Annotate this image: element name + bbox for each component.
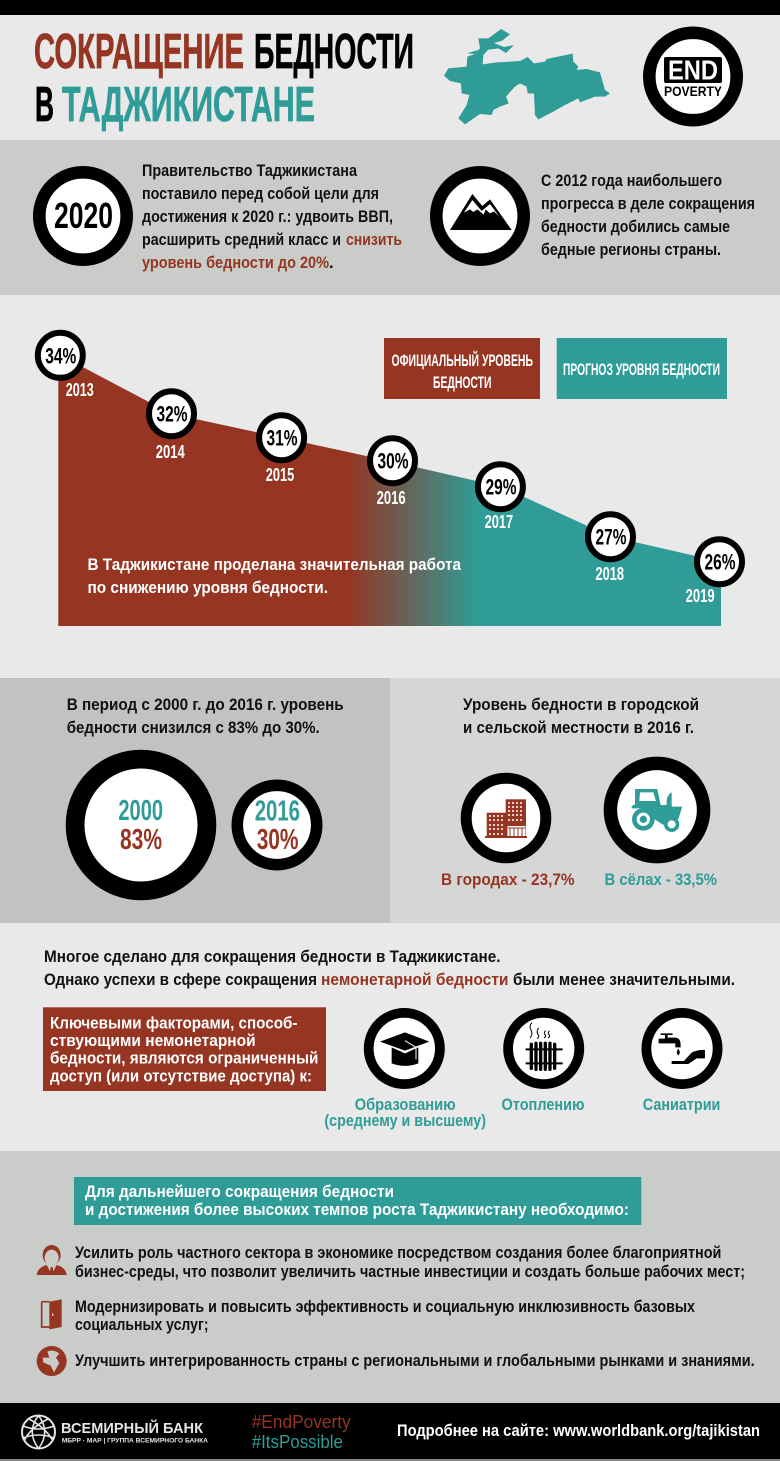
legend: official: [384, 338, 540, 399]
data point 2018: 27%: [596, 525, 626, 550]
label: education: (среднему и высшему): [324, 1112, 486, 1130]
legend: official: БЕДНОСТИ: [433, 373, 492, 392]
callout: key factors: доступ (или отсутствие доступа) к:: [50, 1068, 312, 1086]
data point 2015: 2015: [266, 465, 294, 485]
panel: footer: [0, 1403, 780, 1461]
circle 2016: 30%: [257, 824, 299, 856]
logo: World Bank: МБРР · МАР | ГРУППА ВСЕМИРНОГО БАНКА: [62, 1438, 208, 1445]
data point 2019: [686, 539, 742, 606]
data point 2016: 2016: [377, 488, 406, 508]
heading: и сельской местности в 2016 г.: [463, 719, 694, 737]
icon: 2020 circle: 2020: [54, 195, 113, 236]
heading: В период с 2000 г. до 2016 г. уровень: [67, 696, 344, 714]
panel: poverty chart: [0, 295, 780, 678]
data point 2015: 31%: [266, 426, 298, 451]
icon: 2020 circle: [39, 172, 127, 260]
hashtags: #ItsPossible: [252, 1432, 343, 1452]
heading box: и достижения более высоких темпов роста Таджикистану необходимо:: [85, 1201, 629, 1219]
area chart: [58, 352, 721, 626]
chart caption: В Таджикистане проделана значительная работа: [88, 556, 462, 574]
icon: End Poverty badge: END: [668, 54, 718, 86]
icon: map of Tajikistan: [444, 29, 610, 124]
title: [34, 25, 414, 132]
top black bar: [0, 0, 780, 15]
text: regional progress: [541, 172, 755, 259]
data point 2019: 26%: [704, 550, 736, 575]
item: social services: [75, 1298, 696, 1334]
statement: Однако успехи в сфере сокращения: [44, 971, 317, 989]
label: urban: В городах - 23,7%: [441, 871, 575, 889]
statement: были менее значительными.: [513, 971, 735, 989]
data point 2013: 2013: [66, 380, 94, 400]
title: СОКРАЩЕНИЕ: [34, 25, 244, 79]
callout: key factors: ствующими немонетарной: [50, 1032, 256, 1050]
icon: city: [466, 778, 546, 858]
circle 2016: 2016: [255, 796, 300, 828]
panel: header: [0, 15, 780, 140]
text: regional progress: бедности добились самые: [541, 218, 730, 236]
icon: End Poverty badge: [649, 33, 737, 120]
chart caption: [88, 556, 462, 597]
data point 2019: 2019: [686, 586, 715, 606]
legend: forecast: [557, 338, 727, 399]
text: government goals: [142, 162, 402, 272]
text: government goals: снизить: [346, 231, 402, 249]
circle 2000: 2000: [118, 795, 163, 827]
data point 2017: 2017: [485, 512, 513, 532]
item: private sector: [75, 1244, 745, 1281]
logo: World Bank: ВСЕМИРНЫЙ БАНК: [61, 1419, 204, 1437]
heading: Уровень бедности в городской: [463, 696, 699, 714]
label: rural: В сёлах - 33,5%: [604, 871, 717, 889]
panel: urban vs rural: [390, 678, 780, 923]
data point 2014: 2014: [156, 442, 185, 462]
item: social services: Модернизировать и повысить эффективность и социальную инклюзивность базовых: [75, 1298, 696, 1316]
panel: non-monetary poverty: [0, 923, 780, 1151]
title: В: [35, 78, 54, 132]
heading: [67, 696, 344, 737]
icon: business person: [37, 1245, 67, 1275]
icon: door: [42, 1299, 62, 1329]
text: government goals: поставило перед собой цели для: [142, 185, 379, 203]
label: sanitation: Саниатрии: [643, 1096, 720, 1114]
data point 2013: [38, 333, 94, 400]
panel: decline 2000-2016: [0, 678, 390, 923]
label: education: [324, 1096, 486, 1130]
icon: sanitation: [646, 1013, 718, 1084]
data point 2014: 32%: [156, 402, 188, 427]
icon: heating: [508, 1013, 579, 1084]
data point 2018: 2018: [596, 564, 624, 584]
heading: [463, 696, 699, 737]
text: regional progress: бедные регионы страны.: [541, 241, 721, 259]
data point 2016: [370, 438, 415, 508]
panel: goals: [0, 140, 780, 295]
data point 2013: 34%: [45, 344, 76, 368]
title: ТАДЖИКИСТАНЕ: [62, 78, 315, 132]
logo: World Bank: [22, 1416, 208, 1448]
panel: recommendations: [0, 1151, 780, 1403]
statement: немонетарной бедности: [321, 971, 508, 989]
circle 2000: [75, 759, 207, 891]
icon: globe: [37, 1346, 67, 1376]
circle 2000: 83%: [120, 824, 162, 856]
data point 2017: 29%: [486, 475, 516, 500]
text: government goals: .: [329, 254, 334, 272]
data point 2014: [149, 391, 194, 462]
label: heating: Отоплению: [502, 1096, 584, 1114]
icon: mountain circle: [436, 172, 524, 260]
chart caption: по снижению уровня бедности.: [88, 579, 328, 597]
heading box: Для дальнейшего сокращения бедности: [85, 1183, 394, 1201]
heading box: [74, 1177, 641, 1225]
icon: education: [369, 1013, 440, 1084]
callout: key factors: бедности, являются ограниченный: [50, 1050, 318, 1068]
callout: key factors: [43, 1007, 326, 1091]
data point 2016: 30%: [378, 449, 408, 474]
hashtags: #EndPoverty: [252, 1412, 351, 1432]
heading: бедности снизился с 83% до 30%.: [67, 719, 320, 737]
icon: tractor: [610, 763, 704, 857]
data point 2018: [588, 514, 633, 584]
text: government goals: уровень бедности до 20%: [142, 254, 329, 272]
text: government goals: расширить средний класс и: [142, 231, 341, 249]
text: regional progress: С 2012 года наибольшего: [541, 172, 722, 190]
icon: End Poverty badge: POVERTY: [664, 83, 723, 99]
data point 2017: [478, 464, 523, 532]
text: government goals: достижения к 2020 г.: удвоить ВВП,: [142, 208, 393, 226]
label: education: Образованию: [355, 1096, 456, 1114]
circle 2016: [237, 785, 317, 865]
legend: official: ОФИЦИАЛЬНЫЙ УРОВЕНЬ: [392, 351, 533, 370]
text: regional progress: прогресса в деле сокращения: [541, 195, 755, 213]
statement: Многое сделано для сокращения бедности в Таджикистане.: [44, 948, 500, 966]
hashtags: [252, 1412, 351, 1452]
title: БЕДНОСТИ: [254, 25, 414, 79]
text: government goals: Правительство Таджикистана: [142, 162, 358, 180]
statement: [44, 948, 735, 989]
item: social services: социальных услуг;: [75, 1316, 208, 1334]
data point 2015: [259, 415, 304, 485]
callout: key factors: Ключевыми факторами, способ-: [50, 1014, 298, 1032]
